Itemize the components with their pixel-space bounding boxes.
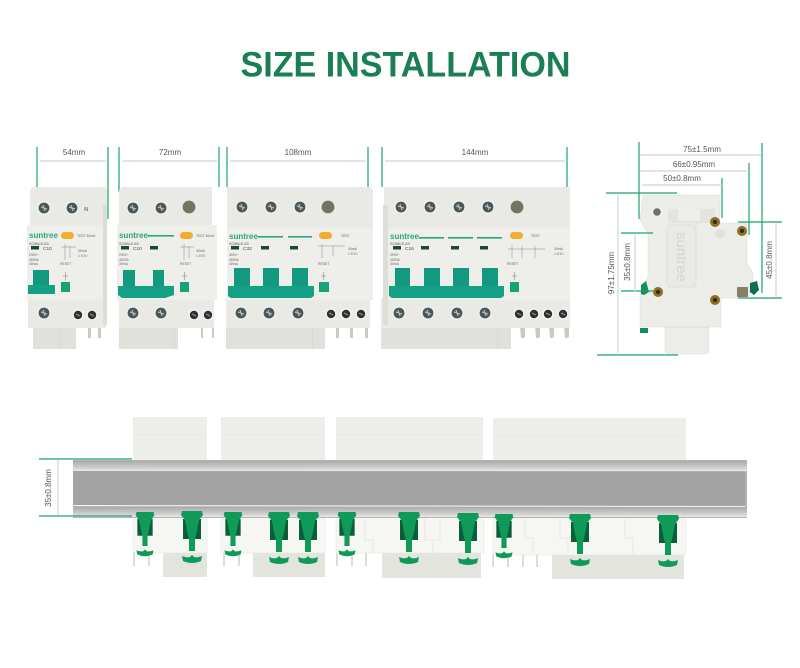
- panel: 72mm breaker: 230V~: [119, 253, 129, 257]
- panel: 108mm breaker: 1 8 5 t: [348, 252, 357, 256]
- dimension: 50±0.8mm: 50±0.8mm: [663, 174, 701, 183]
- panel: 72mm breaker: 4500A: [119, 258, 130, 262]
- dimension: 144mm: 144mm: [462, 148, 489, 157]
- dimension: 50±0.8mm: [642, 174, 722, 218]
- panel: 54mm breaker: 230V~: [29, 253, 39, 257]
- panel: 54mm breaker: C10: [43, 246, 52, 252]
- panel: 72mm breaker: C10: [133, 246, 142, 252]
- upper breaker backs: [133, 417, 686, 463]
- panel: 54mm breaker: N: [84, 207, 88, 213]
- logo plate: suntree: [674, 232, 690, 282]
- panel: 72mm breaker: suntree: [119, 231, 148, 240]
- dimension: 144mm: [382, 147, 567, 187]
- panel: 144mm breaker: 30mA: [390, 262, 400, 266]
- panel: 54mm breaker: RESET: [60, 262, 71, 266]
- dimension: 108mm: [227, 147, 368, 187]
- panel: 108mm breaker: TEST: [341, 234, 350, 238]
- panel: 144mm breaker: C16: [405, 246, 414, 252]
- panel: 72mm breaker: TEST 40mA: [196, 234, 215, 238]
- dimension: 35±0.8mm: [621, 233, 653, 292]
- panel: 144mm breaker: suntree: [390, 232, 419, 241]
- panel: 144mm breaker: RESET: [507, 262, 518, 266]
- title: SIZE INSTALLATION: [240, 46, 570, 84]
- dimension: 72mm: [119, 147, 219, 192]
- panel: 144mm breaker: SC86LE-63: [390, 242, 410, 246]
- dimension: 72mm: 72mm: [159, 148, 181, 157]
- green latches: [640, 281, 759, 333]
- panel: 54mm breaker: TEST 40mA: [77, 234, 96, 238]
- panel: 108mm breaker: 4500A: [229, 258, 240, 262]
- dimension: rail 35±0.8mm: [39, 459, 132, 516]
- dimension: 97±1.75mm: [597, 193, 678, 355]
- panel: 108mm breaker: 400V~: [229, 253, 239, 257]
- panel: 54mm breaker: SC86LE-63: [29, 242, 49, 246]
- dimension: 45±0.8mm: 45±0.8mm: [765, 241, 774, 279]
- panel: rail mounting view: [39, 417, 747, 579]
- panel: 108mm breaker: 30mA: [229, 262, 239, 266]
- dimension: 75±1.5mm: 75±1.5mm: [683, 145, 721, 154]
- panel: 54mm breaker: suntree: [29, 231, 58, 240]
- panel: side view breaker: [597, 142, 782, 355]
- dimension: 54mm: [37, 147, 108, 219]
- panel: 72mm breaker: 30mA: [196, 249, 206, 253]
- panel: 54mm breaker: 30mA: [29, 262, 39, 266]
- panel: 72mm breaker: RESET: [180, 262, 191, 266]
- panel: 108mm breaker: suntree: [229, 232, 258, 241]
- green DIN clips: [136, 511, 679, 567]
- lower white terminal blocks: [133, 517, 686, 567]
- panel: 144mm breaker: 30mA: [554, 247, 564, 251]
- panel: 144mm breaker: [381, 147, 570, 349]
- panel: 54mm breaker: 1 8 5 t: [78, 254, 87, 258]
- panel: 72mm breaker: SC86LE-63: [119, 242, 139, 246]
- dimension: 75±1.5mm: [639, 142, 762, 293]
- dimension: 54mm: 54mm: [63, 148, 85, 157]
- panel: 54mm breaker: 4500A: [29, 258, 40, 262]
- dimension: 97±1.75mm: 97±1.75mm: [607, 252, 616, 294]
- panel: 144mm breaker: 1 8 5 t: [554, 252, 563, 256]
- panel: 144mm breaker: TEST: [531, 234, 540, 238]
- panel: 72mm breaker: 30mA: [119, 262, 129, 266]
- panel: 144mm breaker: 4500A: [390, 258, 401, 262]
- dimension: 66±0.95mm: [640, 160, 749, 235]
- panel: 72mm breaker: [117, 147, 219, 349]
- dimension: rail 35±0.8mm: 35±0.8mm: [44, 469, 53, 507]
- panel: 72mm breaker: 1 8 5 t: [196, 254, 205, 258]
- panel: 108mm breaker: SC86LE-63: [229, 242, 249, 246]
- dimension: 66±0.95mm: 66±0.95mm: [673, 160, 715, 169]
- panel: 54mm breaker: 30mA: [78, 249, 88, 253]
- lower grey blocks: [163, 550, 684, 579]
- panel: 108mm breaker: C32: [243, 246, 252, 252]
- panel: 108mm breaker: RESET: [318, 262, 329, 266]
- DIN rail: [73, 460, 747, 518]
- panel: 108mm breaker: 30mA: [348, 247, 358, 251]
- logo plate: [667, 225, 696, 287]
- dimension: 35±0.8mm: 35±0.8mm: [623, 243, 632, 281]
- panel: 108mm breaker: [226, 147, 373, 349]
- side view body: [640, 195, 753, 354]
- dimension: 108mm: 108mm: [285, 148, 312, 157]
- panel: 144mm breaker: 400V~: [390, 253, 400, 257]
- dimension: 45±0.8mm: [738, 222, 782, 298]
- panel: 54mm breaker: [27, 147, 108, 349]
- rivets: [653, 217, 747, 305]
